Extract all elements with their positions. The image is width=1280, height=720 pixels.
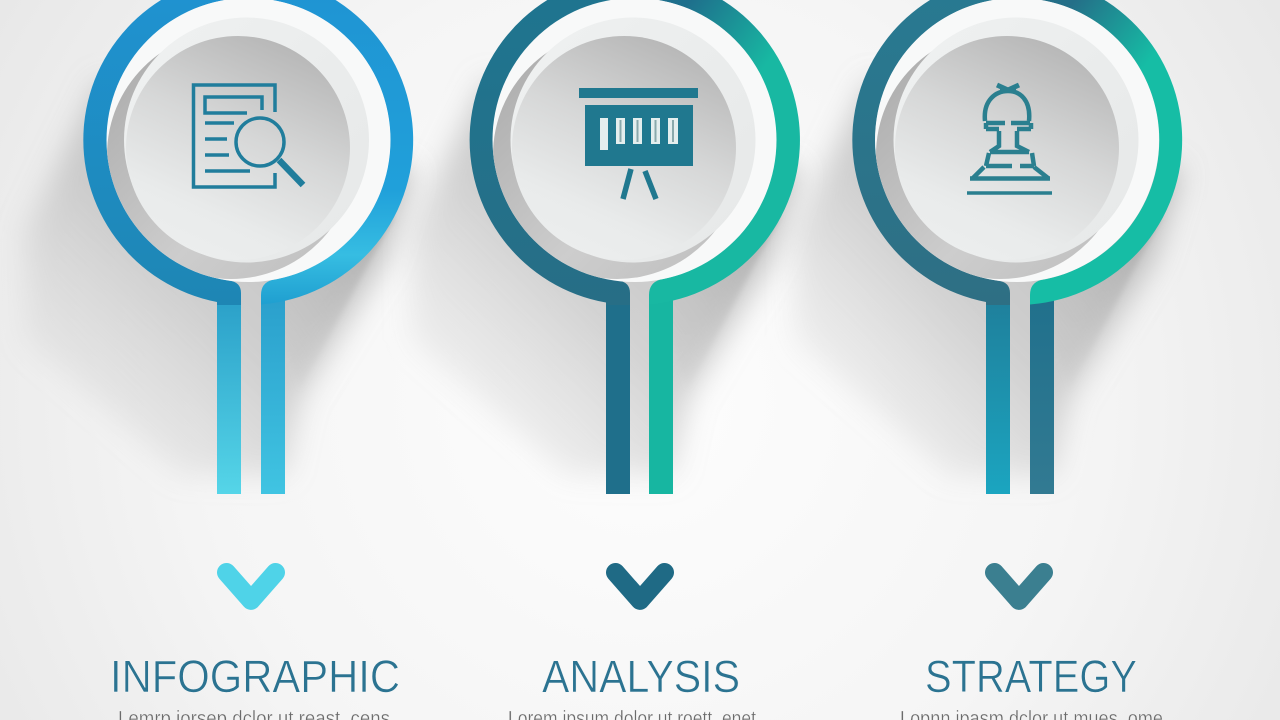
- icon: presentation board: [579, 88, 698, 199]
- ring 3 right arc: [1017, 0, 1182, 305]
- icon: chess pawn: [967, 85, 1052, 193]
- title 2: ANALYSIS: [542, 651, 740, 702]
- stem pair 1: [217, 296, 285, 494]
- step 1: infographic: [83, 0, 413, 720]
- stem pair 2: [606, 296, 673, 494]
- button 1 recess: [126, 36, 350, 260]
- icon: document with magnifier: [194, 85, 303, 187]
- button 1: [124, 18, 369, 262]
- button 2 shadow: [493, 52, 715, 279]
- ring 1 right arc: [248, 0, 413, 304]
- ring 1 inner plate: [106, 0, 390, 282]
- button 2 recess: [512, 36, 736, 260]
- title 1: INFOGRAPHIC: [110, 651, 400, 702]
- button 1 shadow: [107, 54, 330, 279]
- button 2: [510, 18, 756, 262]
- ring 2 right arc: [634, 0, 800, 304]
- ring 3 left arc: [852, 0, 1017, 305]
- button 3: [894, 18, 1138, 262]
- chevron 1: [226, 572, 276, 600]
- step 2: analysis: [470, 0, 800, 720]
- ring 3 inner plate: [875, 0, 1159, 282]
- button 3 shadow: [876, 52, 1098, 279]
- ring 2 inner plate: [492, 0, 776, 282]
- chevron 2: [616, 572, 664, 600]
- button 3 recess: [895, 36, 1119, 260]
- chevron 3: [994, 572, 1044, 600]
- stem pair 3: [986, 296, 1054, 494]
- step 3: strategy: [852, 0, 1182, 720]
- title 3: STRATEGY: [925, 651, 1137, 702]
- ring 1 left arc: [83, 0, 248, 305]
- ring 2 left arc: [470, 0, 634, 305]
- long shadows: [25, 80, 1181, 475]
